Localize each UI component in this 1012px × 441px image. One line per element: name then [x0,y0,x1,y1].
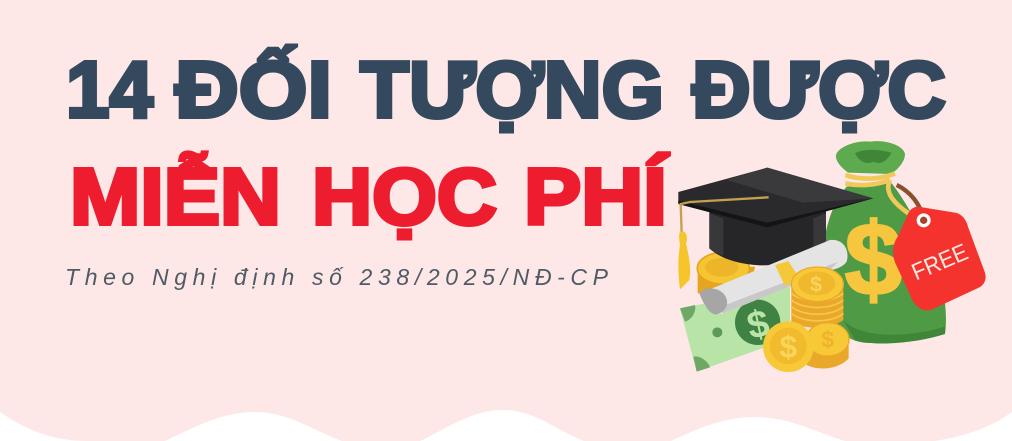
title line 2: MIỄN [70,152,281,241]
title line 2: PHÍ [524,152,669,241]
white wave footer [0,410,1012,441]
title line 2 [70,152,669,241]
icon: graduation cap [678,168,873,289]
icon: free price tag [896,185,982,307]
title line 1: ĐƯỢC [692,45,946,134]
title line 1: TƯỢNG [360,45,664,134]
icon: front coin [763,321,814,372]
icon: front coin: $ [780,328,798,364]
title line 2: HỌC [312,152,497,241]
tag label: FREE [908,239,972,286]
illustration: graduation cap, money and free tag [678,141,982,372]
icon: banknote: $ [743,302,773,348]
icon: back coin stack [697,252,755,293]
title line 1: ĐỐI [175,45,332,134]
icon: diploma scroll [699,240,848,314]
icon: tall coin stack: $ [810,272,822,297]
icon: dollar sign on bag: $ [845,201,902,317]
icon: low coin stack: $ [821,326,834,352]
subtitle: Theo Nghị định số 238/2025/NĐ-CP [65,264,609,290]
icon: low coin stack [806,323,849,368]
icon: money bag [823,141,946,343]
icon: banknote [680,287,790,372]
title line 1: 14 [66,45,153,134]
title line 1 [66,45,946,134]
icon: tall coin stack [791,267,843,328]
